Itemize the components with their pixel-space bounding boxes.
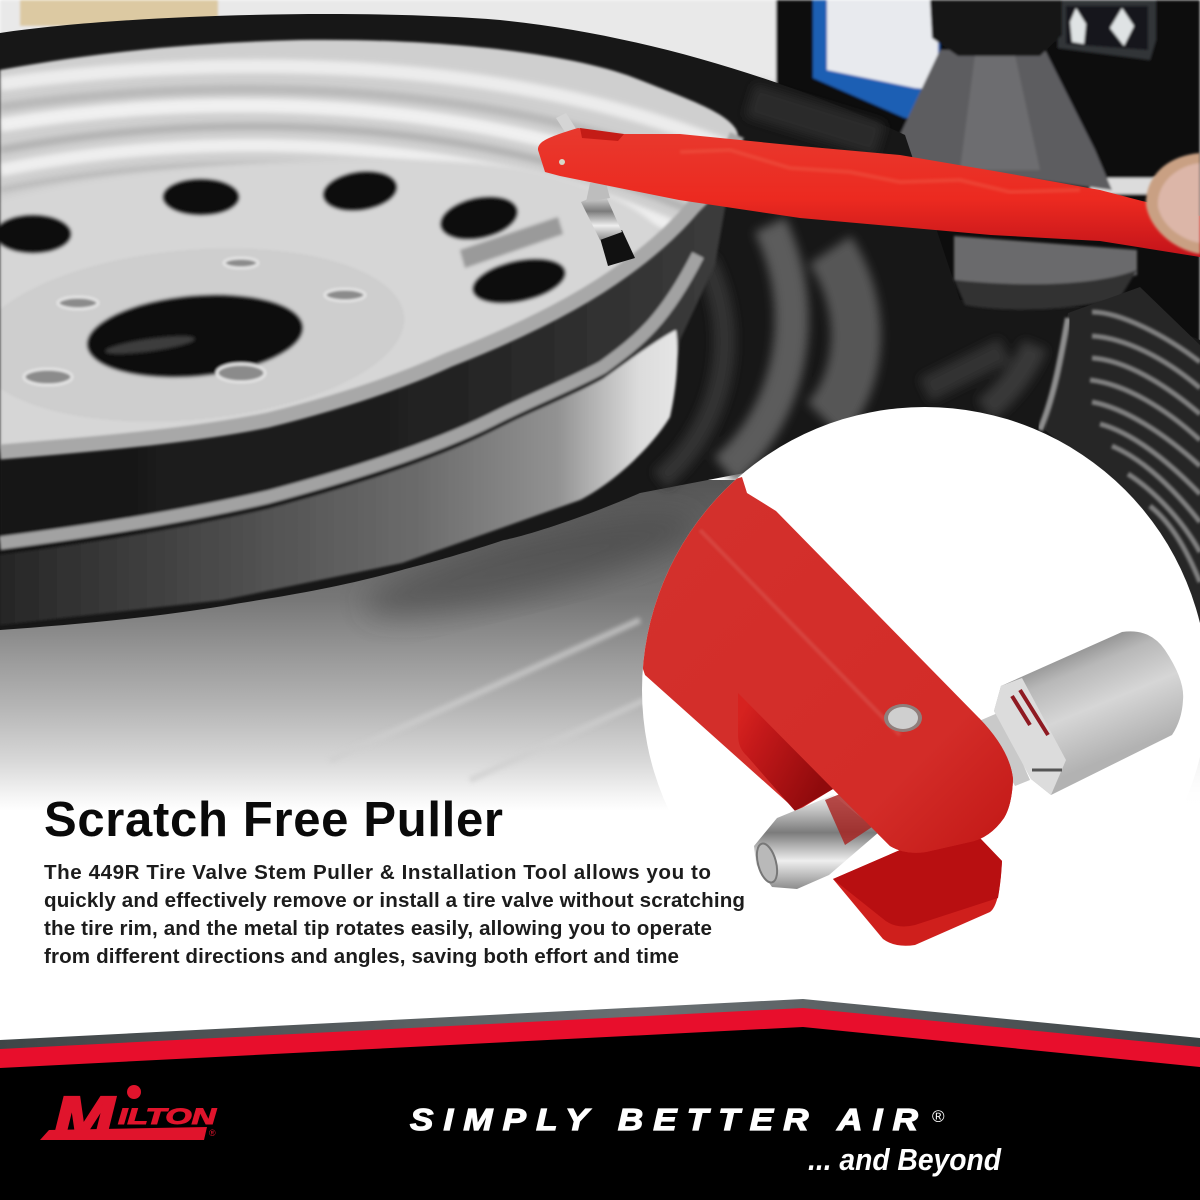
red tool body xyxy=(620,477,1013,853)
chrome socket xyxy=(979,631,1183,795)
logo: Milton: M xyxy=(54,1085,115,1148)
slot xyxy=(738,693,833,811)
inset circle: tool close-up xyxy=(620,407,1200,973)
icon: fingertip xyxy=(1146,153,1200,254)
wheel rim face xyxy=(0,40,738,460)
floor xyxy=(0,480,1200,811)
red valve puller in hand xyxy=(538,113,1200,257)
logo: Milton: ILTON xyxy=(118,1104,218,1129)
workshop wall and machine xyxy=(0,0,1200,420)
body text xyxy=(44,861,745,968)
body text: from different directions and angles, saving both effort and time xyxy=(44,945,679,968)
body text: the tire rim, and the metal tip rotates easily, allowing you to operate xyxy=(44,917,712,940)
logo: Milton xyxy=(40,1085,218,1148)
tread xyxy=(1040,287,1200,625)
footer band xyxy=(0,999,1200,1200)
logo: Milton: ® xyxy=(209,1128,216,1138)
rivet xyxy=(884,704,922,732)
wheel holes xyxy=(0,167,569,385)
body text: quickly and effectively remove or install a tire valve without scratching xyxy=(44,889,745,912)
white fade on right edge of photo xyxy=(1100,640,1200,811)
front of tool over pin xyxy=(833,718,1013,853)
lower prong xyxy=(833,837,1002,946)
valve stem xyxy=(581,183,635,266)
chrome pin xyxy=(753,790,879,889)
heading: Scratch Free Puller xyxy=(44,793,503,847)
rim lip xyxy=(0,135,737,452)
hub ring xyxy=(84,291,306,381)
wheel rim barrel xyxy=(0,135,738,625)
second rim band xyxy=(0,255,698,543)
sub tagline: ... and Beyond xyxy=(808,1142,1002,1177)
tire sidewall highlights xyxy=(660,100,1035,480)
rim flat face xyxy=(6,159,656,372)
body text: The 449R Tire Valve Stem Puller & Installation Tool allows you to xyxy=(44,861,711,884)
tagline: SIMPLY BETTER AIR xyxy=(410,1102,928,1137)
lug nuts xyxy=(24,258,365,385)
background photo: wheel on tire changer xyxy=(0,0,1200,811)
barrel interior xyxy=(0,330,677,625)
black tire mass xyxy=(0,14,1200,650)
dark patch on floor under tire xyxy=(358,495,702,635)
cone base xyxy=(954,236,1137,310)
registered mark: ® xyxy=(932,1107,945,1126)
